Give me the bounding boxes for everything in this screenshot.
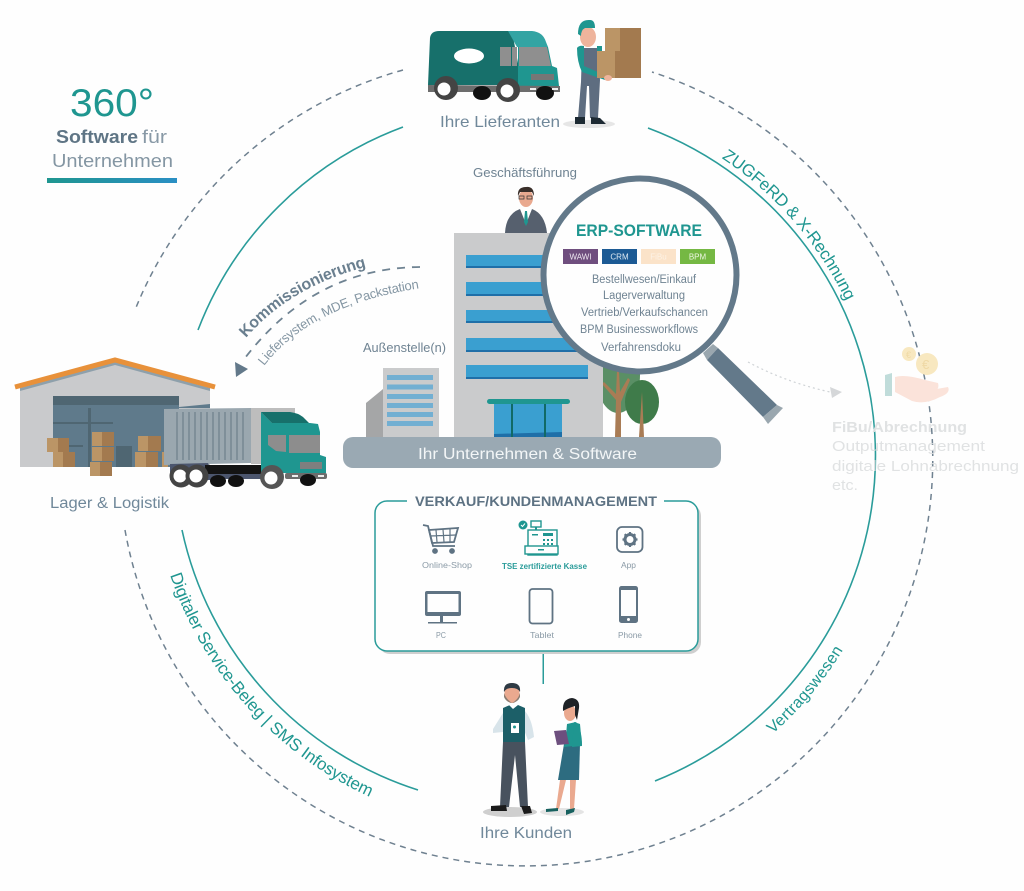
text: FiBu/Abrechnung list: digitale Lohnabrechnung [832,459,1019,475]
module list: BPM Businessworkflows [580,324,698,336]
icon: phone [619,586,638,623]
platform: Ihr Unternehmen & Software [343,437,721,468]
outer dashed ring [125,70,933,866]
module tags: WAWI [569,252,592,262]
icon: hand with coins [885,347,949,402]
dotted arrow to FiBu [748,362,842,398]
label: TSE Kasse: TSE zertifizierte Kasse [502,561,587,571]
label: Tablet: Tablet [530,630,555,640]
illustration: truck [164,408,327,489]
illustration: manager [505,187,547,233]
illustration: branch office [366,368,439,437]
illustration: customer woman [540,698,584,816]
curved label: Digitaler Service-Beleg: Digitaler Service-Beleg | SMS Infosystem [170,572,372,796]
module tags [563,249,715,264]
panel: Verkauf/Kundenmanagement [375,494,701,654]
module tags: BPM [689,252,706,262]
icon: hand with coins: € [922,357,930,372]
illustration: trees [596,337,659,437]
module tags: CRM [610,252,629,262]
label: Außenstelle(n): Außenstelle(n) [363,340,446,355]
arrow: Kommissionierung [235,267,420,377]
label: Kommissionierung: Kommissionierung [238,259,366,338]
module list [580,274,708,354]
icon: app gear [617,527,642,552]
panel heading: VERKAUF/KUNDENMANAGEMENT [415,494,658,509]
cardboard boxes [47,432,168,476]
icon: tablet [530,589,552,624]
illustration: warehouse [15,360,215,476]
curved label: ZUGFeRD: ZUGFeRD & X-Rechnung [722,149,854,300]
windows [466,255,588,379]
module list: Lagerverwaltung [603,290,685,302]
icon: hand with coins: € [906,350,911,360]
module list: Bestellwesen/Einkauf [592,274,697,286]
magnifier handle [703,344,783,424]
label: PC: PC [436,630,446,640]
title: 360 degree software: Software [56,127,138,147]
title: 360 degree software: 360° [70,82,154,125]
label: Liefersystem: Liefersystem, MDE, Packstation [258,282,418,366]
icon: cart [423,525,458,553]
illustration: main office building [454,233,603,437]
label: Ihre Lieferanten: Ihre Lieferanten [440,114,560,131]
title: 360 degree software [47,82,177,183]
ERP heading: ERP-SOFTWARE [576,221,702,240]
text: FiBu/Abrechnung list [832,420,1019,494]
label: Ihre Kunden: Ihre Kunden [480,825,572,842]
label: Online-Shop: Online-Shop [422,560,472,570]
inner teal ring [182,127,875,790]
label: Geschäftsführung: Geschäftsführung [473,166,577,180]
text: FiBu/Abrechnung list: etc. [832,478,858,494]
platform: Ihr Unternehmen & Software: Ihr Unternehmen & Software [418,446,637,463]
magnifier: ERP software [544,178,736,372]
label: Phone: Phone [618,630,642,640]
title: 360 degree software: Unternehmen [52,151,173,171]
connector line [542,651,544,684]
icon: TSE cash register [518,520,558,555]
text: FiBu/Abrechnung list: Outputmanagement [832,439,985,455]
module tags: FiBu [650,252,667,262]
label: App: App [621,560,636,570]
illustration: customer man [483,683,537,817]
icon: PC [425,591,461,624]
module list: Vertrieb/Verkaufschancen [581,307,708,319]
curved label: Vertragswesen: Vertragswesen [766,647,842,731]
title: 360 degree software: für [142,127,167,147]
illustration: courier with boxes [563,20,641,128]
illustration: delivery van [428,31,560,102]
module list: Verfahrensdoku [601,342,681,354]
label: Lager & Logistik: Lager & Logistik [50,495,169,512]
text: FiBu/Abrechnung list: FiBu/Abrechnung [832,420,967,436]
